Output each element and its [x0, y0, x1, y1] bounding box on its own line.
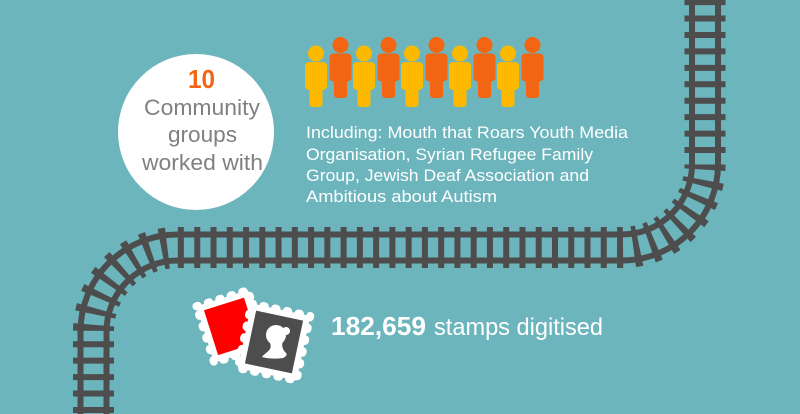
stamps digitised statistic [331, 311, 603, 341]
community groups description: Group, Jewish Deaf Association and [306, 166, 589, 185]
yellow people [305, 46, 519, 107]
silhouette [262, 325, 290, 359]
circle label [141, 95, 263, 175]
stamps digitised statistic: stamps digitised [434, 314, 603, 341]
community groups description: Including: Mouth that Roars Youth Media [306, 123, 629, 142]
community groups description [306, 123, 629, 206]
orange people [330, 37, 544, 98]
stamps digitised statistic: 182,659 [331, 311, 426, 341]
red stamp [196, 290, 266, 363]
circle label: Community [144, 95, 260, 120]
circle label: worked with [141, 150, 263, 175]
number: 10 community groups: 10 [188, 64, 215, 94]
white circle callout [118, 54, 274, 210]
grey stamp [238, 303, 310, 381]
people pictogram row [305, 37, 544, 107]
icon: postage stamps [196, 290, 310, 381]
community groups description: Organisation, Syrian Refugee Family [306, 145, 594, 164]
railway track [80, 0, 718, 414]
circle label: groups [168, 122, 237, 147]
community groups description: Ambitious about Autism [306, 187, 497, 206]
